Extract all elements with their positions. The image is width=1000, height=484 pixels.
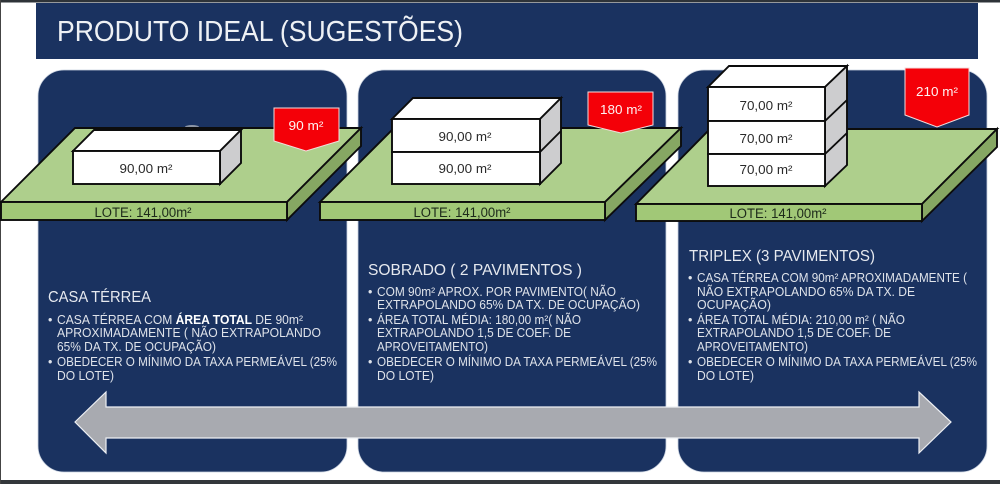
text block: sobrado: •: [368, 313, 372, 327]
text block: casa térrea: OBEDECER O MÍNIMO DA TAXA PERMEÁVEL (25%: [57, 354, 337, 369]
text block: sobrado: •: [368, 355, 372, 369]
panel: sobrado background: [358, 70, 666, 472]
text block: triplex: DO LOTE): [697, 369, 754, 383]
text block: triplex: NÃO EXTRAPOLANDO 65% DA TX. DE: [697, 285, 915, 299]
text block: triplex: •: [688, 313, 692, 327]
text block: triplex: APROVEITAMENTO): [697, 340, 808, 354]
building: three storeys: [708, 66, 847, 186]
building: three storeys: 70,00 m²: [740, 99, 792, 113]
text block: casa térrea: CASA TÉRREA: [48, 287, 151, 306]
text block: sobrado: ÁREA TOTAL MÉDIA: 180,00 m²( NÃO: [377, 312, 581, 327]
building: three storeys: 70,00 m²: [740, 132, 792, 146]
text block: triplex: [688, 248, 977, 383]
flag: 90 m2: 90 m²: [288, 118, 324, 133]
building: one storey: [73, 130, 241, 184]
header banner: [36, 3, 978, 59]
lot 2 label: LOTE: 141,00m²: [414, 205, 511, 220]
text block: casa térrea: APROXIMADAMENTE ( NÃO EXTRAPOLANDO: [57, 326, 321, 340]
text block: casa térrea: 65% DA TX. DE OCUPAÇÃO): [57, 340, 216, 354]
text block: triplex: CASA TÉRREA COM 90m² APROXIMADAMENTE (: [697, 270, 968, 285]
building: three storeys: 70,00 m²: [740, 163, 792, 177]
lot 3 label: LOTE: 141,00m²: [730, 206, 827, 221]
flag: 90 m2: [274, 108, 339, 151]
panel: triplex background: [678, 70, 987, 472]
text block: sobrado: SOBRADO ( 2 PAVIMENTOS ): [368, 262, 582, 279]
text block: triplex: EXTRAPOLANDO 1,5 DE COEF. DE: [697, 326, 891, 340]
text block: triplex: TRIPLEX (3 PAVIMENTOS): [689, 248, 875, 265]
text block: sobrado: EXTRAPOLANDO 1,5 DE COEF. DE: [377, 326, 571, 340]
text block: sobrado: APROVEITAMENTO): [377, 340, 488, 354]
text block: triplex: •: [688, 355, 692, 369]
building: two storeys: 90,00 m²: [438, 162, 492, 176]
flag: 210 m2: [905, 68, 969, 127]
text block: sobrado: OBEDECER O MÍNIMO DA TAXA PERMEÁVEL (25%: [377, 354, 657, 369]
double-headed arrow: [75, 392, 951, 453]
text block: sobrado: •: [368, 285, 372, 299]
panel: casa térrea background: [38, 70, 347, 472]
building: two storeys: [392, 98, 561, 184]
text block: casa térrea: DO LOTE): [57, 369, 114, 383]
flag: 180 m2: [588, 92, 653, 133]
text block: casa térrea: CASA TÉRREA COM ÁREA TOTAL DE 90m²: [57, 312, 303, 327]
text block: triplex: OCUPAÇÃO): [697, 298, 771, 312]
text block: sobrado: COM 90m² APROX. POR PAVIMENTO( NÃO: [377, 285, 616, 299]
text block: sobrado: [368, 262, 657, 383]
text block: casa térrea: •: [48, 313, 52, 327]
lot 2 diagram: [320, 128, 681, 220]
text block: triplex: OBEDECER O MÍNIMO DA TAXA PERMEÁVEL (25%: [697, 354, 977, 369]
flag: 180 m2: 180 m²: [600, 102, 643, 117]
flag: 210 m2: 210 m²: [916, 84, 959, 99]
text block: sobrado: DO LOTE): [377, 369, 434, 383]
text block: casa térrea: •: [48, 355, 52, 369]
lot 3 diagram: [636, 129, 997, 221]
text block: casa térrea: [48, 287, 337, 383]
building: one storey: 90,00 m²: [120, 162, 172, 176]
lot 1 label: LOTE: 141,00m²: [94, 205, 192, 220]
building: two storeys: 90,00 m²: [438, 130, 492, 144]
text block: triplex: ÁREA TOTAL MÉDIA: 210,00 m² ( NÃO: [697, 312, 905, 327]
lot 1 diagram: [1, 125, 361, 220]
text block: triplex: •: [688, 271, 692, 285]
text block: sobrado: EXTRAPOLANDO 65% DA TX. DE OCUPAÇÃO): [377, 298, 640, 312]
title: PRODUTO IDEAL (SUGESTÕES): [57, 16, 463, 48]
